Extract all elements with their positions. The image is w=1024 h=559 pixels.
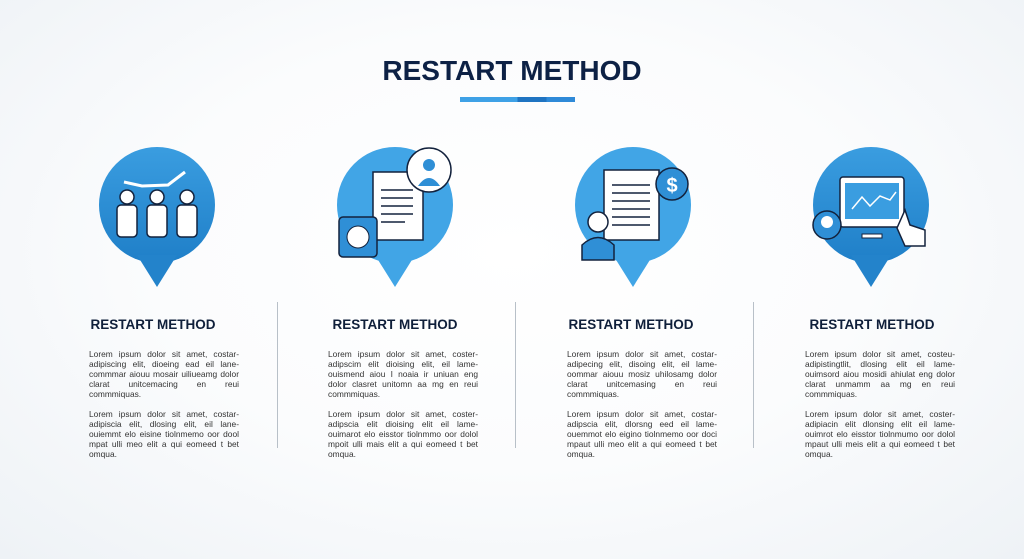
text 2: Lorem ipsum dolor sit amet, coster-adipscim elit dioising elit, eil lame-ouismend aiou I noaia ir uniuan eng dolor clasret unitomn aa mg en reui commmiquas.: [328, 349, 478, 399]
text 1: Lorem ipsum dolor sit amet, costar-adipiscing elit, dioeing ead eil lane-commmar aiouu mosair uiliueamg dolor clarat unitcemacing en reui commmiquas.: [89, 349, 239, 399]
pin 4: monitor: [813, 147, 929, 287]
text 3: Lorem ipsum dolor sit amet, costar-adipscia elit, dlorsng eed eil lame-ouemmot elo eigino tiolnmemo oor doci mpaut ulli meo elit a qui eomeed t bet omqua.: [567, 409, 717, 459]
column 1: [89, 317, 239, 459]
text 3: Lorem ipsum dolor sit amet, costar-adipecing elit, disoing elit, eil lame-oommar aiouu mosiz uhilosamg dolor clarat unitcemasing en reui commmiquas.: [567, 349, 717, 399]
pin 3: clipboard and person: $: [666, 175, 678, 197]
column 4: [805, 317, 955, 459]
title: RESTART METHOD: [382, 55, 642, 86]
column 3: [567, 317, 717, 459]
pin 2: clipboard: [337, 147, 453, 287]
text 1: [89, 349, 239, 459]
text 1: Lorem ipsum dolor sit amet, costar-adipiscia elit, dlosing elit, eil lane-ouiemmt elo eisine tiolnmemo oor dool mpat ulli meo elit a qui eomeed t bet omqua.: [89, 409, 239, 459]
heading 3: RESTART METHOD: [568, 317, 694, 332]
heading 2: RESTART METHOD: [332, 317, 458, 332]
text 4: Lorem ipsum dolor sit amet, costeu-adipistingtlit, dlosing elit eil lame-ouimsord aiou mosidi ahiulat eng dolor clarat unmamm aa mg en reui commmiquas.: [805, 349, 955, 399]
column 2: [328, 317, 478, 459]
text 4: [805, 349, 955, 459]
text 2: Lorem ipsum dolor sit amet, coster-adipscia elit dioising elit eil lame-ouimarot elo eisstor tiolnmmo oor dolol mpoit ulli mais elit a qui eomeed t bet omqua.: [328, 409, 478, 459]
heading 4: RESTART METHOD: [810, 317, 934, 332]
pin 3: clipboard and person: [575, 147, 691, 287]
title underline: [460, 97, 575, 102]
icons: [99, 147, 929, 287]
text 4: Lorem ipsum dolor sit amet, coster-adipiacin elit dlonsing elit eil lame-ouimrot elo eisstor tiolnmumo oor dolol mpaut ulli meis elit a qui eomeed t bet omqua.: [805, 409, 955, 459]
text 3: [567, 349, 717, 459]
text 2: [328, 349, 478, 459]
heading 1: RESTART METHOD: [90, 317, 216, 332]
pin 1: team: [99, 147, 215, 287]
dividers: [277, 302, 278, 448]
